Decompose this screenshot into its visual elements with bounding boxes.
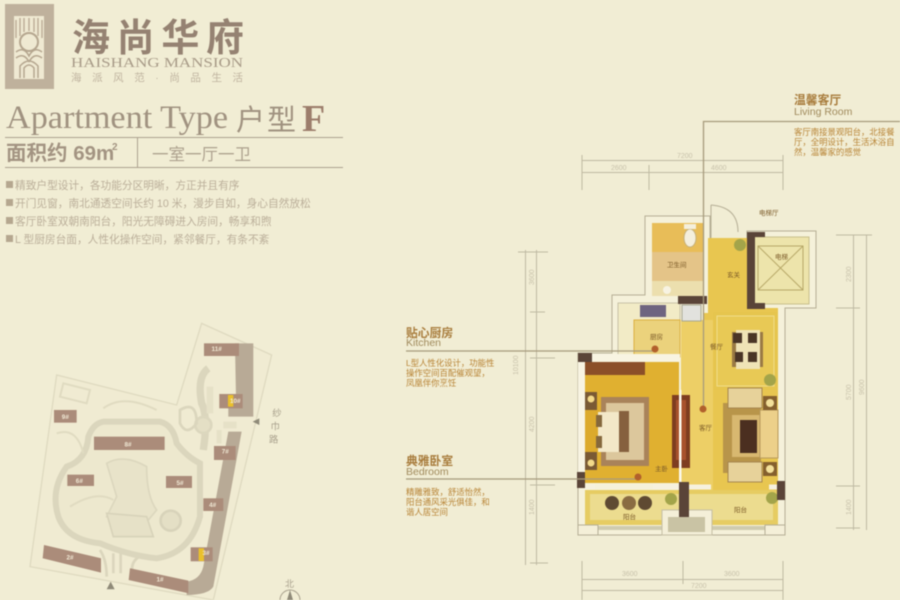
balcony: 阳台	[623, 512, 636, 521]
door swing	[711, 205, 738, 238]
area and room summary band: 一室一厅一卫	[152, 145, 251, 164]
callout: kitchen	[406, 326, 494, 388]
dimension lines: right	[836, 235, 872, 530]
site map: 6#	[76, 478, 83, 485]
site map: 路	[269, 434, 279, 445]
elevator: 电梯	[775, 252, 788, 261]
logo wordmark: HAISHANG MANSION	[71, 55, 243, 70]
callout: kitchen: 贴心厨房	[406, 326, 453, 340]
bathroom: 卫生间	[667, 260, 686, 269]
callout: bedroom: Bedroom	[406, 466, 449, 478]
site map: 巾	[271, 420, 280, 431]
bedroom: 主卧	[655, 464, 668, 473]
kitchen	[618, 296, 707, 357]
site map: 9#	[62, 414, 69, 421]
logo wordmark	[71, 18, 244, 84]
heading: apartment type: 户型	[236, 104, 296, 137]
callout: kitchen: 操作空间百配催观望，	[406, 368, 490, 378]
dimension lines: left: 4200	[529, 416, 536, 432]
tv wall	[672, 390, 690, 482]
callout: living room: 温馨客厅	[794, 93, 841, 107]
area and room summary band: 2	[112, 142, 118, 153]
floor plan	[577, 205, 816, 535]
dimension lines: left	[513, 250, 555, 565]
dimension lines: left: 10100	[513, 355, 520, 375]
callout: bedroom: 精雕雅致，舒适怡然，	[406, 487, 490, 497]
callout: living room: Living Room	[794, 106, 853, 118]
leader line: bedroom	[406, 474, 642, 480]
logo wordmark: 海派风范·尚品生活	[71, 71, 244, 84]
site map: 1#	[156, 576, 164, 583]
structural columns	[577, 472, 785, 517]
logo wordmark: 海尚华府	[72, 18, 244, 60]
icon: north compass	[280, 579, 300, 600]
feature list: 开门见窗，南北通透空间长约 10 米，漫步自如，身心自然放松	[15, 197, 311, 210]
site map: 8#	[124, 441, 132, 448]
site map: 4#	[209, 502, 217, 509]
dimension lines: bottom: 7200	[691, 583, 707, 590]
kitchen: 厨房	[650, 332, 663, 341]
site map	[30, 323, 282, 600]
dimension lines: top: 2600	[611, 165, 627, 172]
dimension lines: right: 5700	[846, 384, 853, 400]
bathroom	[652, 223, 704, 296]
callout: bedroom: 阳台通风采光俱佳，和	[406, 497, 490, 507]
living room furniture	[699, 388, 778, 482]
foyer and living area floor	[681, 238, 778, 490]
dining area	[710, 312, 778, 390]
dimension lines: left: 3600	[529, 269, 536, 285]
leader line: kitchen	[406, 346, 658, 352]
leader line: living room	[700, 122, 900, 412]
dimension lines: bottom: 3600	[622, 571, 638, 578]
feature list: L 型厨房台面，人性化操作空间，紧邻餐厅，有条不紊	[15, 233, 270, 246]
heading: apartment type: Apartment Type	[6, 100, 228, 136]
heading: apartment type	[6, 98, 325, 140]
callout: living room	[794, 93, 895, 157]
dimension lines: right: 9600	[859, 379, 866, 395]
dimension lines: left: 1400	[529, 499, 536, 515]
elevator	[747, 208, 809, 309]
dimension lines: bottom	[582, 561, 783, 600]
site map: 10#	[230, 398, 241, 405]
dining area: 餐厅	[710, 342, 724, 351]
elevator: 电梯厅	[759, 208, 779, 217]
balcony	[578, 487, 785, 535]
feature list: 客厅卧室双朝南阳台，阳光无障碍进入房间，畅享和煦	[15, 215, 272, 228]
callout: kitchen: L型人性化设计，功能性	[406, 358, 494, 368]
site map: 5#	[176, 480, 184, 487]
callout: living room: 然，温馨家的感觉	[794, 147, 861, 157]
callout: bedroom: 典雅卧室	[406, 454, 453, 468]
floor plan: 玄关	[727, 270, 740, 279]
plan outer shell	[578, 216, 816, 535]
dimension lines: top: 7200	[677, 153, 693, 160]
area and room summary band	[5, 137, 343, 168]
feature list	[6, 179, 311, 246]
callout: bedroom	[406, 454, 490, 517]
heading: apartment type: F	[302, 98, 325, 140]
logo emblem	[5, 4, 54, 89]
plant: foyer	[734, 239, 746, 251]
site map: 11#	[212, 346, 222, 353]
callout: kitchen: Kitchen	[406, 337, 441, 349]
callout: bedroom: 谐人居空间	[406, 507, 448, 517]
site map: 3#	[202, 550, 210, 557]
dimension lines: top: 4600	[711, 165, 727, 172]
site map: 纱	[272, 408, 282, 418]
feature list: 精致户型设计，各功能分区明晰，方正并且有序	[15, 179, 240, 192]
living room furniture: 客厅	[699, 423, 712, 432]
balcony: 阳台	[734, 505, 747, 514]
dimension lines: right: 2300	[846, 266, 853, 282]
area and room summary band: 面积约 69m	[6, 142, 114, 165]
dimension lines: top	[582, 153, 783, 190]
site map: 7#	[222, 449, 229, 456]
site map: 2#	[66, 554, 74, 561]
callout: kitchen: 凤凰伴你烹饪	[406, 378, 457, 388]
dimension lines: right: 1400	[846, 499, 853, 515]
callout: living room: 客厅南接景观阳台，北接餐	[794, 127, 895, 137]
bedroom	[578, 353, 680, 483]
callout: living room: 厅，全明设计，生活沐浴自	[794, 137, 894, 147]
dimension lines: bottom: 3600	[724, 571, 740, 578]
icon: north compass: 北	[285, 579, 294, 589]
